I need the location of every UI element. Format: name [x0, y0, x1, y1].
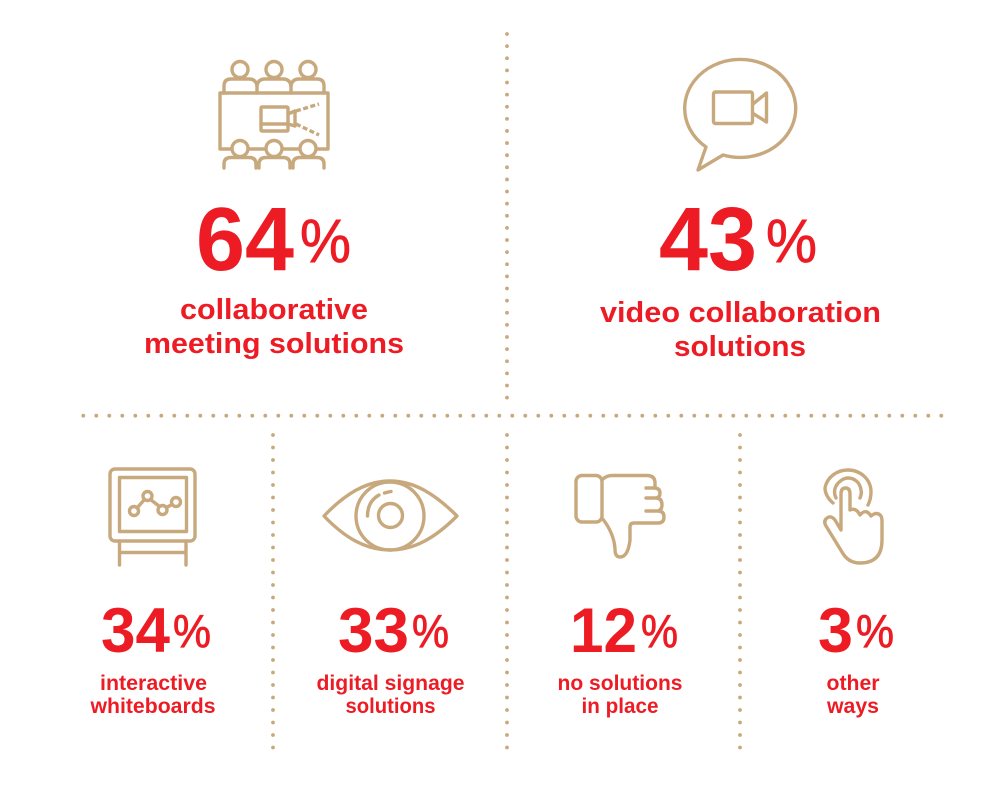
panel: collaborative meeting solutions — [144, 62, 404, 360]
label: digital signage solutions: digital signage — [316, 672, 464, 695]
icon: thumbs down — [576, 476, 664, 557]
figure: 64% — [196, 190, 351, 290]
figure: 12%: 12 — [570, 596, 637, 666]
label: video collaboration solutions: video collaboration — [600, 297, 881, 329]
label: digital signage solutions — [316, 672, 464, 718]
panel: other ways — [818, 470, 894, 718]
figure: 64%: % — [300, 207, 351, 275]
figure: 33% — [338, 596, 449, 666]
label: other ways: other — [826, 672, 880, 695]
label: collaborative meeting solutions: meeting solutions — [144, 328, 404, 360]
label: no solutions in place — [558, 672, 682, 718]
label: collaborative meeting solutions: collaborative — [180, 294, 368, 326]
figure: 12% — [570, 596, 678, 666]
icon: speech bubble with video camera — [685, 59, 796, 170]
figure: 34%: 34 — [101, 596, 170, 666]
icon: eye — [324, 481, 457, 550]
panel: video collaboration solutions — [600, 59, 881, 363]
label: digital signage solutions: solutions — [346, 695, 436, 718]
label: video collaboration solutions: solutions — [674, 331, 806, 363]
figure: 64%: 64 — [196, 190, 294, 290]
figure: 43% — [659, 190, 817, 290]
icon: meeting room with projector — [220, 62, 328, 168]
panel: interactive whiteboards — [89, 469, 216, 718]
figure: 33%: 33 — [338, 596, 409, 666]
figure: 43%: 43 — [659, 190, 757, 290]
label: collaborative meeting solutions — [144, 294, 404, 360]
icon: finger tapping hand — [825, 470, 882, 563]
figure: 34%: % — [173, 605, 211, 657]
panel: digital signage solutions — [316, 481, 464, 718]
icon: whiteboard on easel with line chart — [110, 469, 195, 565]
figure: 3%: 3 — [818, 596, 853, 666]
figure: 3%: % — [856, 605, 894, 657]
label: no solutions in place: no solutions — [558, 672, 682, 695]
figure: 12%: % — [641, 605, 678, 657]
figure: 3% — [818, 596, 894, 666]
figure: 43%: % — [766, 207, 817, 275]
panel: no solutions in place — [558, 476, 682, 718]
figure: 33%: % — [412, 605, 449, 657]
label: no solutions in place: in place — [582, 695, 658, 718]
label: interactive whiteboards — [89, 672, 216, 718]
label: interactive whiteboards: whiteboards — [89, 695, 216, 718]
figure: 34% — [101, 596, 211, 666]
label: video collaboration solutions — [600, 297, 881, 363]
label: interactive whiteboards: interactive — [100, 672, 207, 695]
label: other ways: ways — [826, 695, 879, 718]
label: other ways — [826, 672, 880, 718]
